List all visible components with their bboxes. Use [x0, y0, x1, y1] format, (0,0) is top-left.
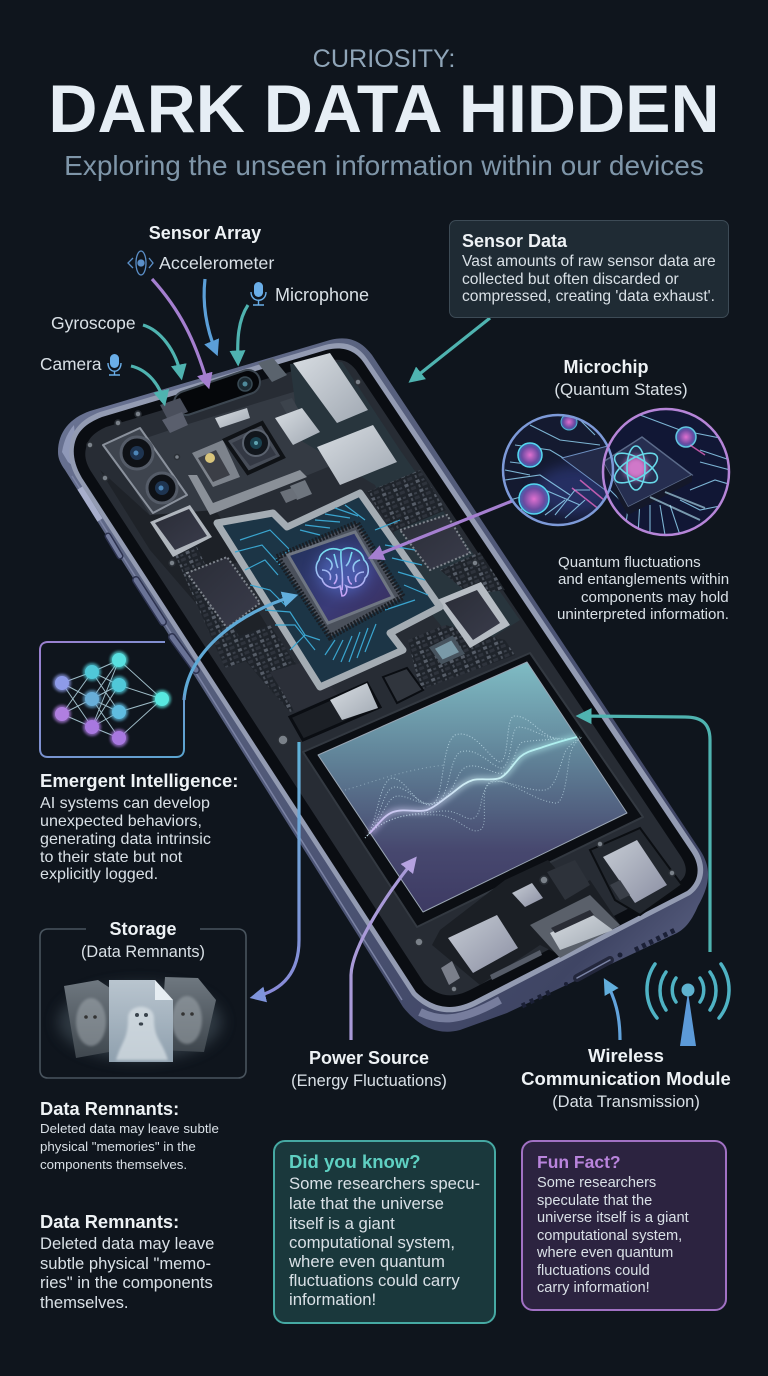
callout: did you know: information!	[289, 1290, 376, 1309]
circuit board	[85, 360, 686, 995]
screws	[87, 379, 675, 992]
callout: fun fact: computational system,	[537, 1228, 682, 1244]
arrow: wireless to battery	[580, 716, 710, 952]
text: emergent intelligence: Emergent Intelligence:	[40, 770, 238, 791]
microchip lens rings	[503, 409, 729, 535]
callout: fun fact: Fun Fact?	[537, 1152, 621, 1172]
text: emergent intelligence: AI systems can develop	[40, 794, 210, 812]
callout: did you know	[273, 1140, 496, 1324]
callout: sensor data	[449, 220, 729, 318]
callout: did you know: fluctuations could carry	[289, 1271, 460, 1290]
label: quantum states: (Quantum States)	[554, 380, 688, 399]
text: emergent intelligence: unexpected behaviors,	[40, 812, 202, 830]
callout: fun fact: fluctuations could	[537, 1263, 650, 1279]
text: data remnants second: themselves.	[40, 1293, 129, 1312]
label: microchip: Microchip	[563, 357, 648, 377]
arrow: storage	[254, 742, 299, 997]
label: wireless communication module	[521, 1045, 731, 1111]
text: data remnants first: physical "memories" in the	[40, 1139, 196, 1154]
label: gyroscope: Gyroscope	[51, 313, 136, 333]
text: data remnants first: Deleted data may leave subtle	[40, 1121, 219, 1136]
lower strip	[290, 668, 423, 740]
label: microphone: Microphone	[275, 285, 369, 305]
callout: fun fact: where even quantum	[537, 1245, 673, 1261]
text: emergent intelligence: explicitly logged.	[40, 865, 158, 883]
callout: sensor data: Vast amounts of raw sensor data are	[462, 253, 716, 270]
text: data remnants first	[40, 1098, 219, 1172]
centre camera	[225, 423, 283, 473]
title	[48, 45, 720, 181]
label: sensor array: Sensor Array	[149, 223, 261, 243]
arrow: power source	[351, 860, 414, 1040]
callout: did you know: computational system,	[289, 1233, 455, 1252]
side highlights	[62, 425, 675, 1018]
battery	[303, 653, 643, 927]
icon: accelerometer	[128, 251, 153, 275]
label: wireless communication module: Wireless	[588, 1045, 664, 1066]
L-shaped bracket	[188, 470, 307, 515]
secondary plates	[100, 362, 520, 695]
label: storage: Storage	[109, 919, 177, 939]
callout: did you know: itself is a giant	[289, 1214, 395, 1233]
text: quantum fluctuations: uninterpreted information.	[557, 606, 729, 623]
main heading: DARK DATA HIDDEN	[48, 71, 720, 147]
arrow: microphone	[238, 305, 248, 362]
label: camera: Camera	[40, 354, 101, 374]
label: wireless communication module: (Data Transmission)	[552, 1093, 700, 1111]
storage panel with ghost files	[40, 929, 246, 1078]
microchip lens left	[504, 416, 606, 524]
arrow: accelerometer blue	[204, 279, 216, 352]
arrow: camera	[131, 366, 164, 402]
callout: fun fact	[521, 1140, 727, 1311]
CPU with brain	[277, 523, 403, 637]
rear camera module	[103, 428, 187, 513]
icon: wireless antenna	[647, 964, 729, 1046]
callout: fun fact: carry information!	[537, 1280, 650, 1296]
callout: sensor data: compressed, creating 'data exhaust'.	[462, 288, 715, 305]
text: quantum fluctuations: and entanglements within	[558, 571, 729, 588]
text: data remnants second: Data Remnants:	[40, 1211, 179, 1232]
eyebrow: CURIOSITY:	[313, 45, 455, 73]
label: data remnants subtitle: (Data Remnants)	[81, 943, 205, 961]
callout: did you know: Did you know?	[289, 1151, 421, 1172]
callout: fun fact: universe itself is a giant	[537, 1210, 689, 1226]
arrow: gyroscope	[143, 325, 181, 376]
arrow: microchip	[372, 497, 522, 557]
label: energy fluctuations: (Energy Fluctuations)	[291, 1072, 447, 1090]
text: data remnants first: components themselves.	[40, 1157, 187, 1172]
callout: did you know: late that the universe	[289, 1194, 444, 1213]
text: quantum fluctuations: Quantum fluctuations	[558, 554, 701, 571]
arrow: emergent intelligence	[184, 596, 294, 700]
text: quantum fluctuations	[557, 554, 729, 623]
flash module	[192, 440, 240, 487]
arrow: accelerometer purple	[152, 279, 208, 385]
callout: did you know: where even quantum	[289, 1252, 445, 1271]
subtitle: Exploring the unseen information within our devices	[64, 150, 704, 181]
callout: sensor data: Sensor Data	[462, 231, 567, 251]
text: quantum fluctuations: components may hold	[581, 589, 729, 606]
callout: fun fact: speculate that the	[537, 1193, 652, 1209]
text: data remnants first: Data Remnants:	[40, 1098, 179, 1119]
arrows	[131, 279, 710, 1040]
screen bezel	[69, 343, 703, 1012]
text: emergent intelligence: generating data intrinsic	[40, 830, 211, 848]
icon: camera microphone	[108, 354, 121, 375]
dark chips	[150, 505, 510, 662]
icon: microphone	[251, 282, 266, 305]
energy wave	[345, 716, 582, 838]
SMD component fields	[175, 470, 570, 935]
text: data remnants second: ries" in the components	[40, 1273, 213, 1292]
text: emergent intelligence: to their state but not	[40, 848, 182, 866]
text: data remnants second: subtle physical "memo-	[40, 1254, 211, 1273]
arrow: sensor data	[412, 318, 490, 380]
label: power source: Power Source	[309, 1048, 429, 1068]
callout: fun fact: Some researchers	[537, 1175, 656, 1191]
callout: sensor data: collected but often discarded or	[462, 270, 679, 288]
silver shields top	[160, 353, 397, 500]
neural network panel	[40, 642, 184, 757]
arrow: port	[606, 982, 620, 1040]
label: wireless communication module: Communication Module	[521, 1068, 731, 1089]
notch and front camera	[186, 377, 252, 403]
bottom components	[432, 828, 682, 985]
label: accelerometer: Accelerometer	[159, 253, 274, 273]
callout: did you know: Some researchers specu-	[289, 1174, 480, 1193]
text: data remnants second	[40, 1211, 214, 1312]
phone illustration	[58, 338, 708, 1032]
microchip lens right	[604, 410, 728, 534]
text: data remnants second: Deleted data may leave	[40, 1234, 214, 1253]
phone metal body	[58, 338, 708, 1032]
text: emergent intelligence	[40, 770, 238, 883]
CPU silver frame and PCB traces	[217, 488, 440, 687]
